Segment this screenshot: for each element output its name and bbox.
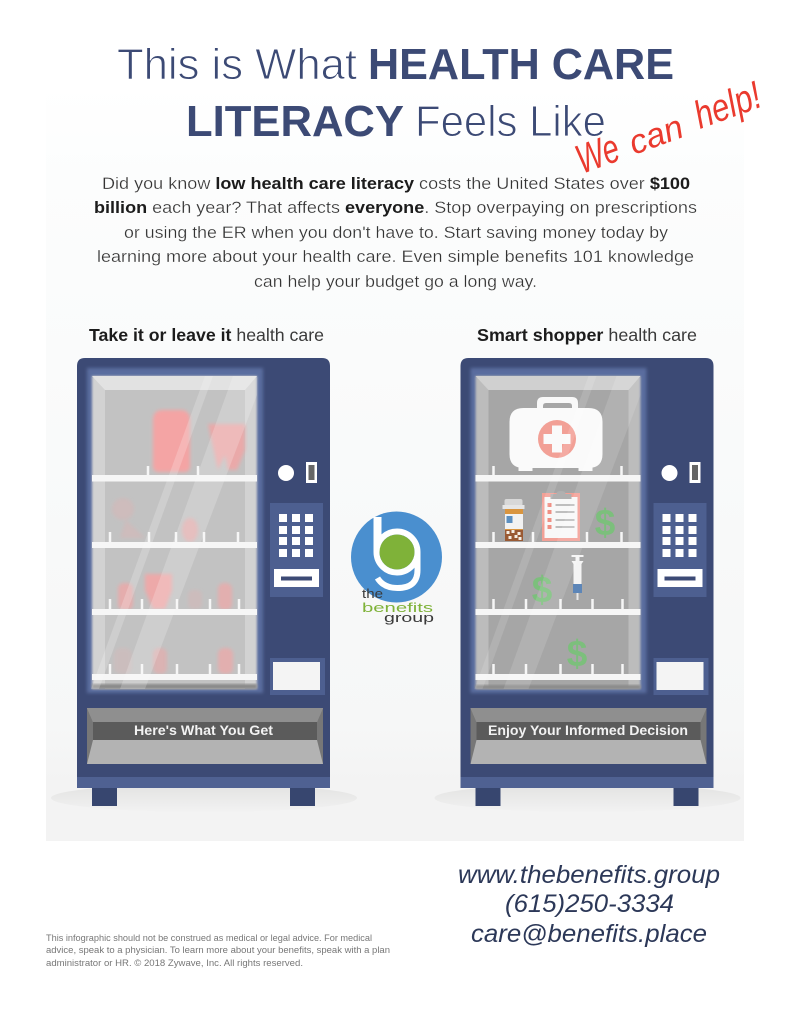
tray label: Enjoy Your Informed Decision bbox=[488, 723, 688, 738]
icon: pill bottle bbox=[502, 499, 524, 541]
title: Feels Like bbox=[415, 97, 606, 146]
handwritten note: We can help!: can bbox=[624, 108, 688, 163]
disclaimer bbox=[46, 933, 390, 968]
display window bbox=[92, 376, 257, 689]
handwritten note: We can help!: help! bbox=[688, 74, 767, 137]
display window bbox=[476, 376, 640, 689]
contact details: www.thebenefits.group bbox=[458, 861, 720, 889]
title bbox=[117, 40, 674, 146]
shelves bbox=[476, 466, 640, 680]
machine body bbox=[51, 358, 357, 812]
contact details: (615)250-3334 bbox=[505, 890, 674, 918]
icon: syringe bbox=[572, 555, 584, 600]
heading: smart shopper: Smart shopper health care bbox=[477, 325, 697, 345]
icon: clipboard checklist bbox=[542, 491, 580, 541]
shelves bbox=[92, 466, 257, 680]
disclaimer: advice, speak to a physician. To learn more about your benefits, speak with a plan bbox=[46, 945, 390, 955]
blurred red products bbox=[112, 410, 245, 674]
glass glare bbox=[474, 376, 640, 689]
handwritten note: We can help! bbox=[569, 74, 767, 182]
logo wordmark: benefits bbox=[362, 601, 433, 615]
intro paragraph: can help your budget go a long way. bbox=[254, 272, 537, 291]
logo circle bbox=[351, 512, 442, 602]
title: LITERACY bbox=[186, 97, 404, 146]
intro paragraph: learning more about your health care. Even simple benefits 101 knowledge bbox=[97, 247, 694, 266]
logo center dot bbox=[380, 534, 414, 570]
logo wordmark: group bbox=[384, 611, 434, 625]
intro paragraph: Did you know low health care literacy costs the United States over $100 bbox=[102, 174, 690, 193]
icon: first aid kit bbox=[510, 397, 602, 471]
heading: take it or leave it: Take it or leave it health care bbox=[89, 325, 324, 345]
glass glare bbox=[91, 376, 257, 689]
tray label: Here's What You Get bbox=[134, 723, 274, 738]
handwritten note: We can help!: We bbox=[569, 125, 625, 182]
icon: dollar signs: $ bbox=[595, 502, 616, 543]
background panel bbox=[46, 85, 744, 841]
contact details: care@benefits.place bbox=[471, 920, 707, 948]
icon: dollar signs: $ bbox=[532, 569, 553, 610]
intro paragraph: billion each year? That affects everyone . Stop overpaying on prescriptions bbox=[94, 198, 697, 217]
logo wordmark bbox=[362, 587, 434, 625]
logo letterforms bbox=[376, 517, 418, 588]
machine body bbox=[434, 358, 740, 812]
intro paragraph: or using the ER when you don't have to. Start saving money today by bbox=[124, 223, 669, 242]
contact details bbox=[458, 861, 720, 948]
disclaimer: administrator or HR. © 2018 Zywave, Inc. All rights reserved. bbox=[46, 958, 303, 968]
icon: dollar signs: $ bbox=[567, 633, 588, 674]
vending machine: smart shopper bbox=[434, 358, 740, 812]
vending machine: take it or leave it bbox=[51, 358, 357, 812]
title: This is What bbox=[117, 40, 357, 89]
disclaimer: This infographic should not be construed as medical or legal advice. For medical bbox=[46, 933, 372, 943]
logo: the benefits group bbox=[351, 512, 442, 625]
icon: dollar signs bbox=[532, 502, 616, 674]
title: HEALTH CARE bbox=[368, 40, 674, 89]
intro paragraph bbox=[94, 174, 697, 291]
logo wordmark: the bbox=[362, 587, 383, 601]
